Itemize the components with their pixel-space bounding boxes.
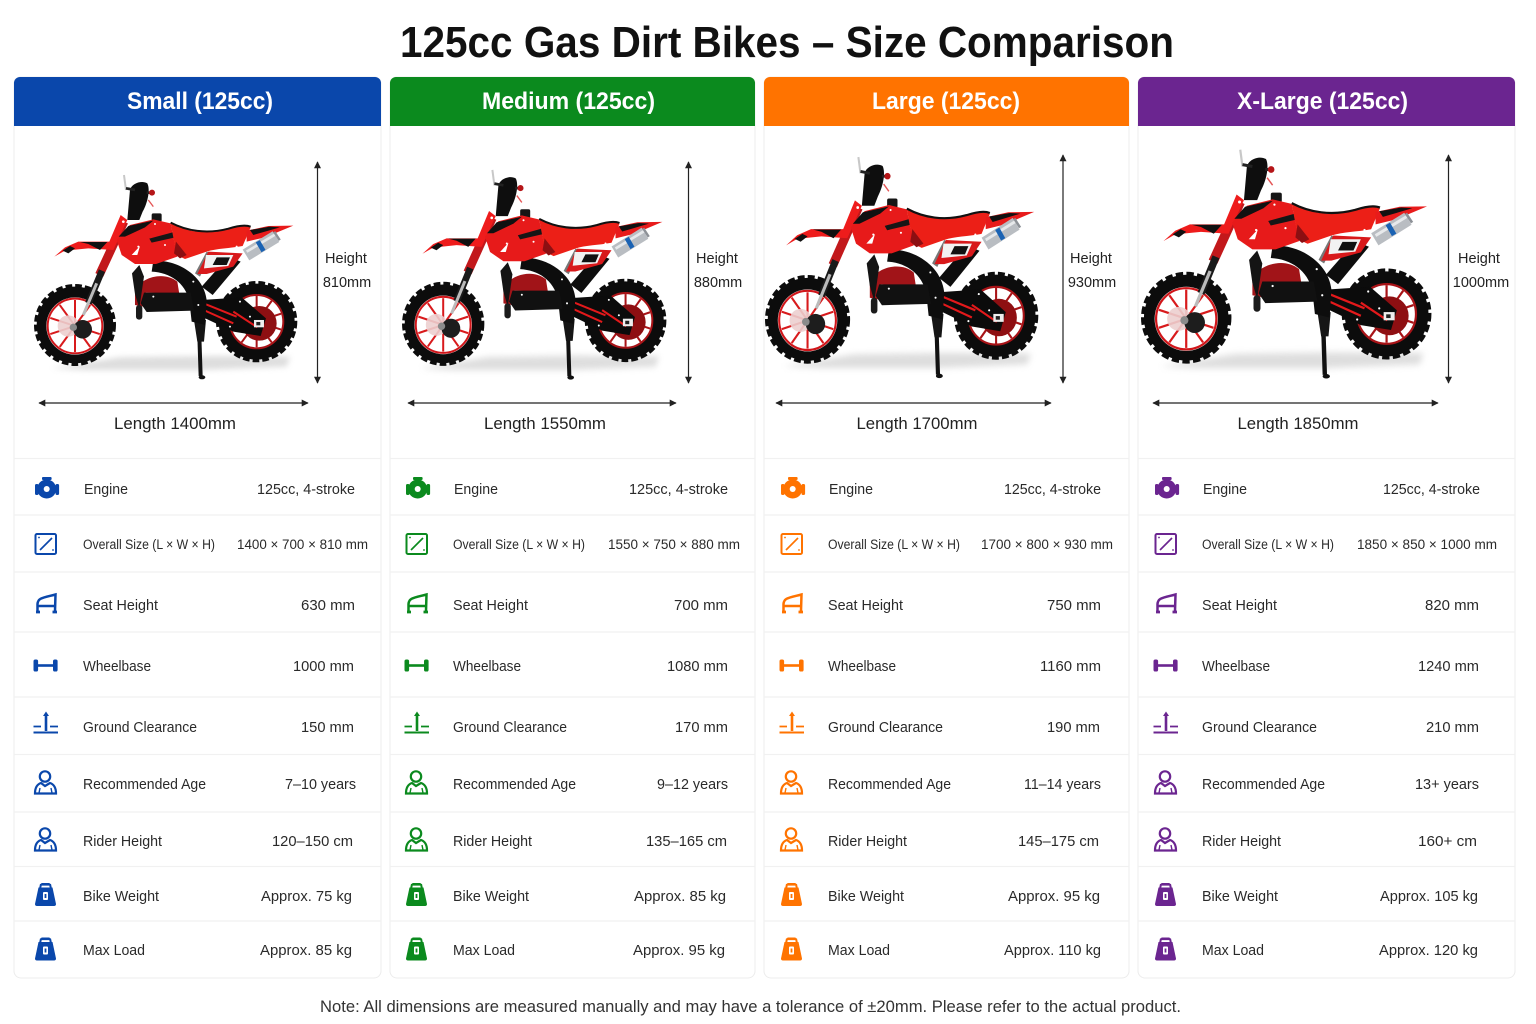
height dimension: Height [1458, 251, 1500, 267]
length dimension: Length 1400mm [114, 414, 236, 433]
row: engine: Engine [454, 481, 498, 498]
height dimension: 1000mm [1453, 275, 1509, 291]
row: seat height: 630 mm [301, 597, 355, 614]
row: overall size: 1700 × 800 × 930 mm [981, 537, 1113, 552]
row: seat height [1156, 594, 1479, 614]
row: engine: Engine [1203, 481, 1247, 498]
row: seat height: 750 mm [1047, 597, 1101, 614]
row: overall size: 1400 × 700 × 810 mm [237, 537, 368, 552]
row: recommended age: Recommended Age [828, 776, 951, 793]
row: engine [406, 477, 728, 498]
row: bike weight: Approx. 75 kg [261, 888, 352, 905]
row: wheelbase [404, 658, 728, 675]
row: wheelbase: Wheelbase [83, 658, 151, 675]
row: ground clearance: 170 mm [675, 719, 728, 736]
row: ground clearance: 210 mm [1426, 719, 1479, 736]
row: bike weight: Bike Weight [1202, 888, 1279, 905]
row: ground clearance: Ground Clearance [83, 719, 197, 736]
row: seat height: Seat Height [1202, 597, 1278, 614]
length dimension: Length 1850mm [1238, 414, 1358, 433]
row: recommended age: 13+ years [1415, 776, 1479, 793]
row: wheelbase [780, 658, 1101, 675]
row: wheelbase: 1160 mm [1040, 658, 1101, 675]
length dimension: Length 1550mm [484, 414, 606, 433]
row: bike weight: Approx. 95 kg [1008, 888, 1100, 905]
row: rider height [35, 828, 353, 850]
row: max load: Approx. 120 kg [1379, 942, 1478, 959]
row: max load: Approx. 85 kg [260, 942, 352, 959]
row: ground clearance [34, 712, 354, 736]
row: wheelbase [1154, 658, 1479, 675]
illustration: small bike [36, 175, 295, 379]
row: rider height: Rider Height [828, 833, 908, 850]
row: recommended age: Recommended Age [1202, 776, 1325, 793]
row: ground clearance: Ground Clearance [828, 719, 943, 736]
illustration: medium bike [404, 170, 664, 380]
row: seat height [782, 594, 1101, 614]
row: ground clearance [780, 712, 1100, 736]
height dimension: Height [696, 251, 738, 267]
row: bike weight [1155, 883, 1478, 906]
row: overall size: 1550 × 750 × 880 mm [608, 537, 740, 552]
footnote: Note: All dimensions are measured manually and may have a tolerance of ±20mm. Please refer to the actual product. [320, 997, 1181, 1016]
row: recommended age: Recommended Age [453, 776, 576, 793]
header: small: Small (125cc) [127, 88, 273, 115]
header: medium: Medium (125cc) [482, 88, 655, 115]
row: rider height: 145–175 cm [1018, 833, 1099, 850]
row: overall size [1156, 534, 1497, 554]
row: recommended age: 9–12 years [657, 776, 728, 793]
row: engine: Engine [829, 481, 873, 498]
row: wheelbase [34, 658, 354, 675]
row: wheelbase: Wheelbase [453, 658, 521, 675]
row: max load: Approx. 95 kg [633, 942, 725, 959]
height dimension [318, 162, 371, 383]
row: recommended age: 11–14 years [1024, 776, 1101, 793]
panel: x-large [1138, 77, 1515, 978]
row: rider height [406, 828, 727, 850]
row: wheelbase: 1240 mm [1418, 658, 1479, 675]
height dimension: 930mm [1068, 275, 1116, 291]
row: rider height: 160+ cm [1418, 833, 1477, 850]
row: wheelbase: Wheelbase [1202, 658, 1270, 675]
row: rider height: 120–150 cm [272, 833, 353, 850]
header: large [764, 77, 1129, 126]
row: max load: Approx. 110 kg [1004, 942, 1101, 959]
row: bike weight: Bike Weight [453, 888, 530, 905]
title: 125cc Gas Dirt Bikes – Size Comparison [400, 18, 1174, 67]
row: engine [35, 477, 355, 498]
row: overall size [406, 534, 740, 554]
row: overall size: Overall Size (L × W × H) [1202, 537, 1334, 552]
row: overall size [36, 534, 368, 554]
row: max load: Max Load [828, 942, 890, 959]
header: x-large: X-Large (125cc) [1237, 88, 1408, 115]
row: max load: Max Load [453, 942, 515, 959]
row: ground clearance: 190 mm [1047, 719, 1100, 736]
height dimension: Height [1070, 251, 1112, 267]
row: seat height [407, 594, 728, 614]
header: large: Large (125cc) [872, 88, 1020, 115]
row: overall size: 1850 × 850 × 1000 mm [1357, 537, 1497, 552]
row: max load [1155, 938, 1478, 960]
row: bike weight [406, 883, 726, 906]
row: ground clearance: Ground Clearance [453, 719, 567, 736]
row: bike weight: Bike Weight [83, 888, 160, 905]
row: rider height [781, 828, 1099, 850]
height dimension [688, 162, 742, 383]
row: overall size: Overall Size (L × W × H) [453, 537, 585, 552]
row: rider height [1155, 828, 1477, 850]
row: recommended age [35, 771, 356, 794]
row: rider height: Rider Height [1202, 833, 1282, 850]
row: ground clearance [1154, 712, 1479, 736]
height dimension [1063, 155, 1116, 383]
row: seat height [36, 594, 355, 614]
illustration: x-large bike [1143, 150, 1429, 379]
row: overall size [782, 534, 1113, 554]
panel: medium [390, 77, 755, 978]
row: engine: 125cc, 4-stroke [629, 481, 728, 498]
row: recommended age [781, 771, 1101, 794]
row: seat height: Seat Height [828, 597, 904, 614]
panel: small [14, 77, 381, 978]
row: max load [781, 938, 1101, 960]
row: rider height: Rider Height [83, 833, 163, 850]
row: engine: Engine [84, 481, 128, 498]
header: x-large [1138, 77, 1515, 126]
row: seat height: Seat Height [83, 597, 159, 614]
row: ground clearance [404, 712, 728, 736]
row: ground clearance: Ground Clearance [1202, 719, 1317, 736]
row: bike weight [781, 883, 1100, 906]
row: engine: 125cc, 4-stroke [1004, 481, 1101, 498]
row: bike weight: Bike Weight [828, 888, 905, 905]
header: small [14, 77, 381, 126]
height dimension: 810mm [323, 275, 371, 291]
row: engine [1155, 477, 1480, 498]
panel: large [764, 77, 1129, 978]
header: medium [390, 77, 755, 126]
height dimension [1448, 155, 1509, 383]
row: recommended age [1155, 771, 1479, 794]
row: engine: 125cc, 4-stroke [1383, 481, 1480, 498]
row: max load: Max Load [83, 942, 145, 959]
row: wheelbase: 1080 mm [667, 658, 728, 675]
length dimension: Length 1700mm [856, 414, 978, 433]
row: recommended age: 7–10 years [285, 776, 356, 793]
row: seat height: 820 mm [1425, 597, 1479, 614]
row: recommended age: Recommended Age [83, 776, 206, 793]
row: max load: Max Load [1202, 942, 1264, 959]
row: engine [781, 477, 1101, 498]
height dimension: 880mm [694, 275, 742, 291]
row: wheelbase: Wheelbase [828, 658, 896, 675]
row: seat height: Seat Height [453, 597, 529, 614]
row: max load [406, 938, 725, 960]
row: bike weight: Approx. 85 kg [634, 888, 726, 905]
row: rider height: Rider Height [453, 833, 533, 850]
row: overall size: Overall Size (L × W × H) [83, 537, 215, 552]
row: bike weight [35, 883, 352, 906]
height dimension: Height [325, 251, 367, 267]
illustration: large bike [767, 157, 1036, 378]
row: overall size: Overall Size (L × W × H) [828, 537, 960, 552]
row: max load [35, 938, 352, 960]
row: ground clearance: 150 mm [301, 719, 354, 736]
row: wheelbase: 1000 mm [293, 658, 354, 675]
row: engine: 125cc, 4-stroke [257, 481, 355, 498]
row: bike weight: Approx. 105 kg [1380, 888, 1478, 905]
row: seat height: 700 mm [674, 597, 728, 614]
row: recommended age [406, 771, 728, 794]
row: rider height: 135–165 cm [646, 833, 727, 850]
